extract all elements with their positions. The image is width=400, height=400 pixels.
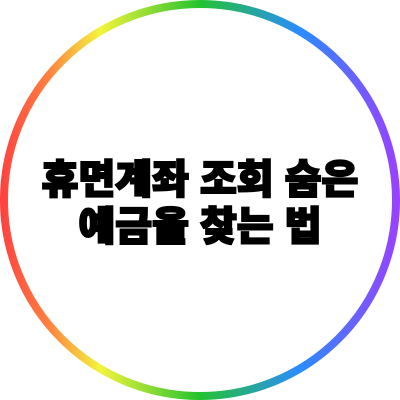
title line 1: 휴면계좌 조회 숨은 [42,158,358,202]
title [42,158,358,249]
title line 2: 예금을 찾는 법 [78,205,322,249]
